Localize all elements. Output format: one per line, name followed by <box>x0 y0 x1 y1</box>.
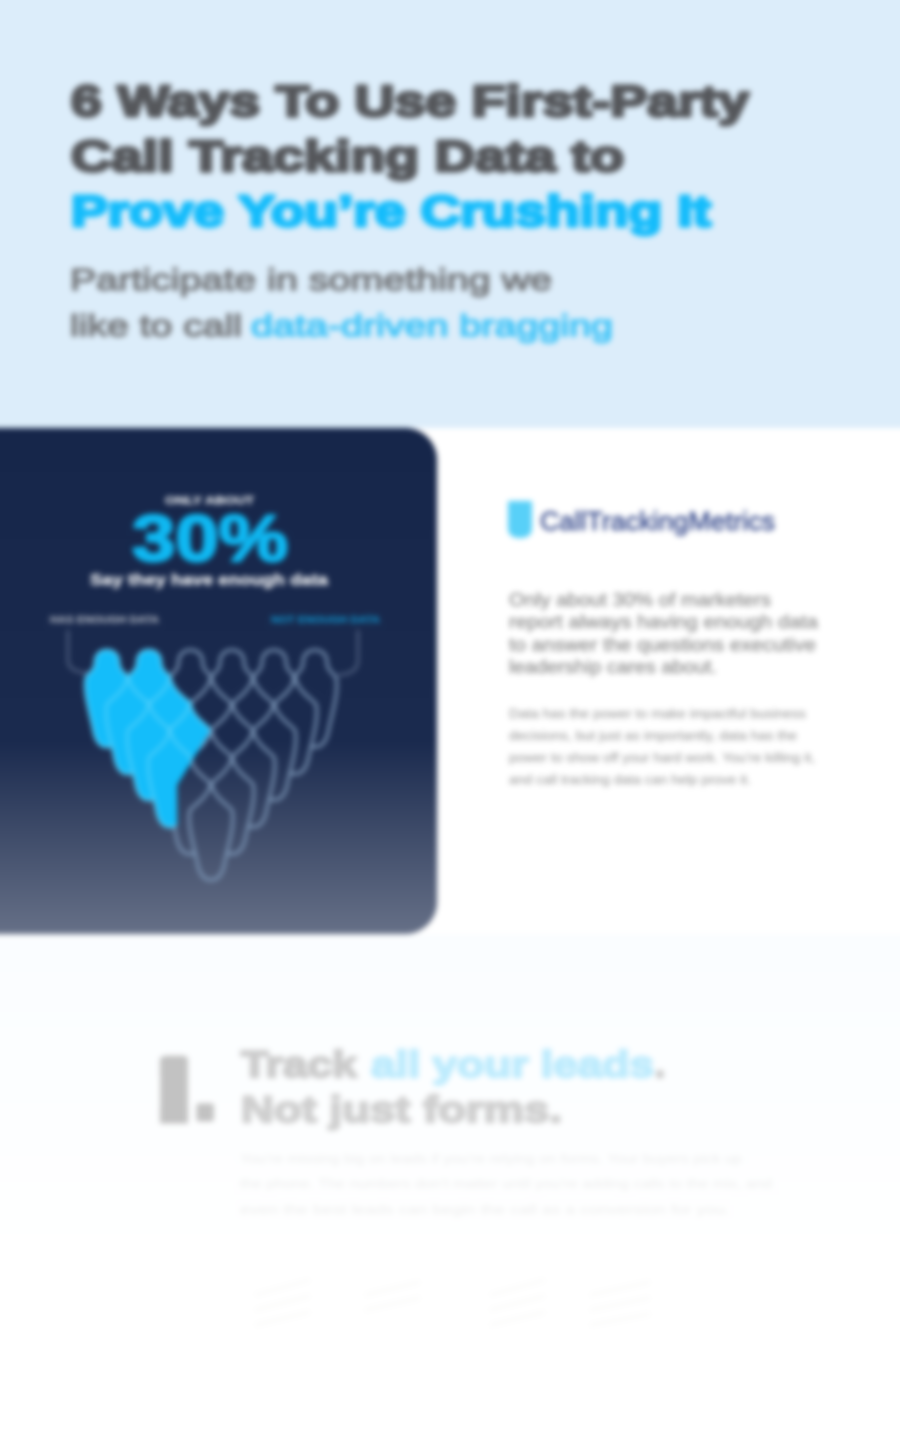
title: Call Tracking Data to <box>71 132 624 181</box>
stat lead-in: ONLY ABOUT <box>165 495 254 507</box>
panel background <box>0 428 437 934</box>
lower section background <box>0 934 900 1441</box>
stat caption: Say they have enough data <box>90 572 328 589</box>
supporting paragraph <box>509 706 815 787</box>
section body: You’re missing big on leads if you’re relying on forms. Your buyers pick up <box>240 1151 742 1166</box>
subtitle: data-driven bragging <box>251 308 613 343</box>
intro paragraph <box>509 590 819 677</box>
section number: 1 <box>136 1040 206 1139</box>
logo wordmark: CallTrackingMetrics <box>540 506 775 536</box>
stat number: 30% <box>132 501 288 575</box>
icon: shield <box>508 501 532 538</box>
subtitle <box>70 262 613 343</box>
section heading: . <box>655 1044 665 1085</box>
intro paragraph: leadership cares about. <box>509 657 717 677</box>
section number: . <box>193 1039 217 1138</box>
section heading: Track <box>241 1044 357 1085</box>
title <box>71 77 750 236</box>
supporting paragraph: Data has the power to make impactful business <box>509 706 807 721</box>
title: Prove You’re Crushing It <box>71 187 711 236</box>
section heading: all your leads <box>371 1044 654 1085</box>
people filled: share with enough data <box>85 650 212 827</box>
legend: not enough data: NOT ENOUGH DATA <box>271 614 380 626</box>
intro paragraph: report always having enough data <box>509 612 819 632</box>
subtitle: like to call <box>70 308 242 343</box>
section number <box>157 1052 217 1126</box>
section heading: Not just forms. <box>241 1089 562 1130</box>
header band <box>0 0 900 428</box>
supporting paragraph: power to show off your hard work. You’re killing it, <box>509 750 815 765</box>
supporting paragraph: decisions, but just as importantly, data has the <box>509 728 797 743</box>
faint illustration row <box>255 1280 650 1325</box>
title: 6 Ways To Use First-Party <box>71 77 750 126</box>
panel: 30% statistic <box>0 428 437 934</box>
section body: even the best leads can begin the call as a conversion for you. <box>240 1202 730 1217</box>
infographic canvas <box>0 0 900 1134</box>
people outlines <box>85 650 337 880</box>
section body: the phone. The numbers don’t matter until you’re adding calls to the mix, and <box>240 1176 772 1191</box>
supporting paragraph: and call tracking data can help prove it. <box>509 772 751 787</box>
subtitle: Participate in something we <box>70 262 552 297</box>
section body <box>240 1151 772 1217</box>
section 1 <box>157 1046 666 1133</box>
intro paragraph: Only about 30% of marketers <box>509 590 771 610</box>
bracket connectors <box>68 630 358 675</box>
section heading <box>241 1044 665 1130</box>
legend: has enough data: HAS ENOUGH DATA <box>50 614 159 626</box>
intro paragraph: to answer the questions executive <box>509 635 816 655</box>
logo <box>508 501 775 538</box>
